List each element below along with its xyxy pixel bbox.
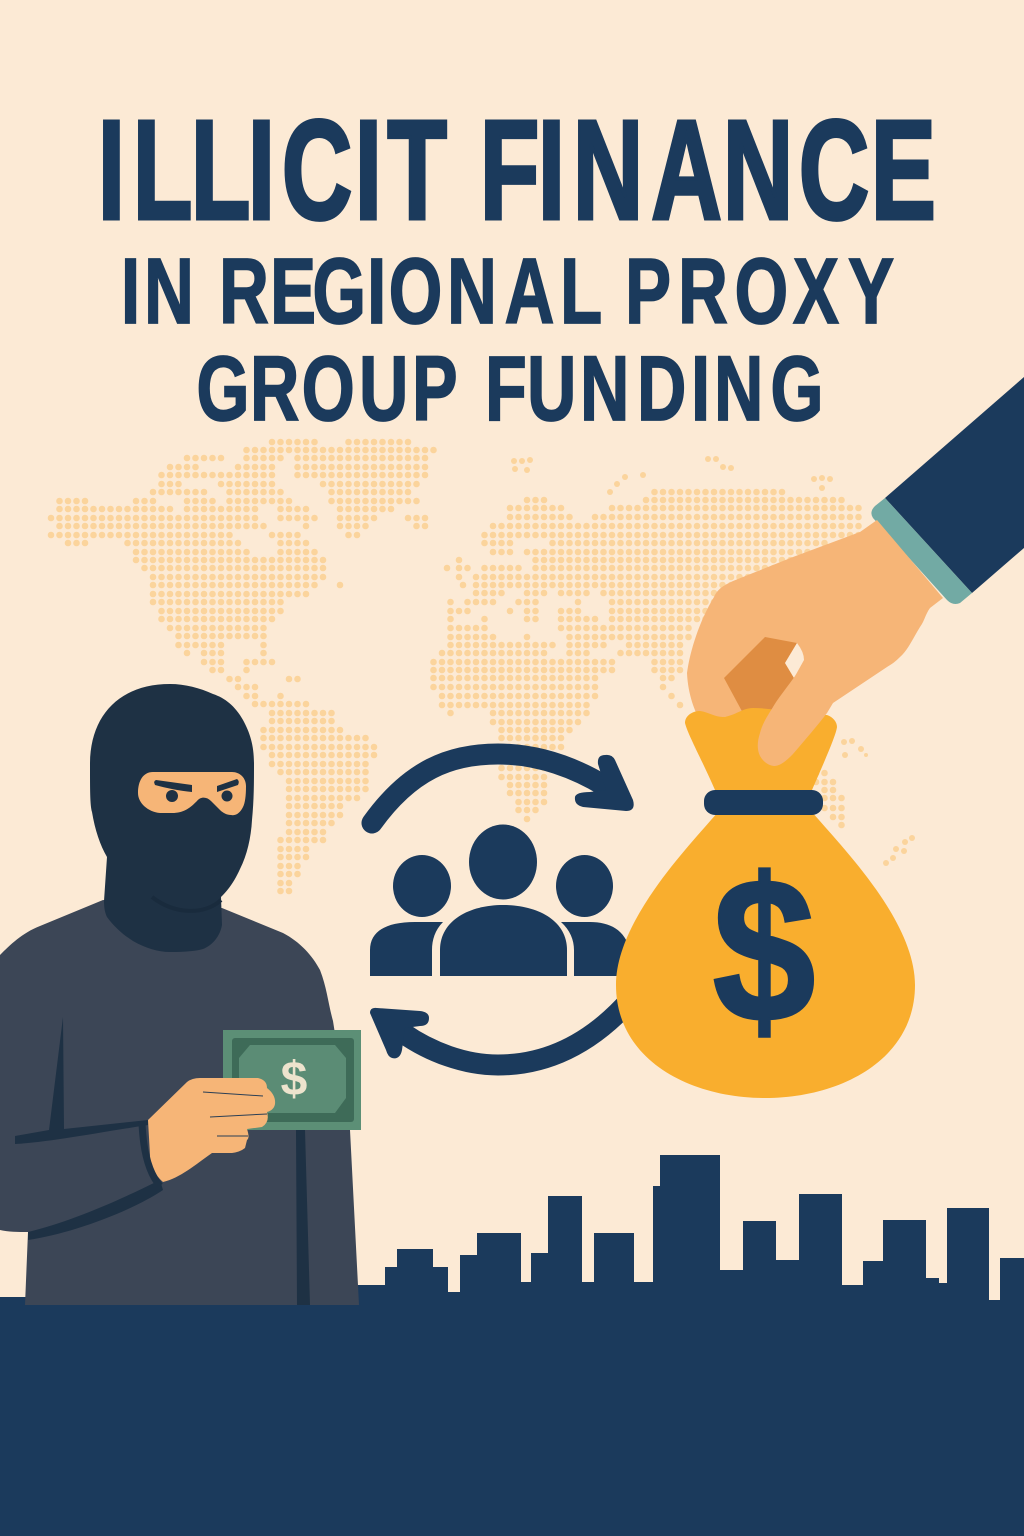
- arrow: top circular: [372, 754, 634, 823]
- icon: group of people: [370, 824, 630, 976]
- title: [98, 90, 936, 440]
- arrow: bottom circular: [370, 1000, 630, 1065]
- banknote: [223, 1030, 361, 1130]
- dotted world map: [51, 442, 915, 891]
- mask chin fold: [152, 897, 221, 911]
- suit sleeve: [885, 377, 1024, 593]
- money bag: $: [713, 836, 815, 1065]
- sweater: [0, 900, 359, 1305]
- title: GROUP FUNDING: [196, 338, 823, 440]
- brows and eyes: [154, 779, 239, 802]
- masked figure: [0, 684, 361, 1305]
- title: ILLICIT FINANCE: [98, 90, 936, 249]
- title: IN REGIONAL PROXY: [121, 240, 894, 343]
- balaclava: [90, 684, 254, 952]
- cuff: [142, 1122, 160, 1186]
- banknote: $: [281, 1053, 308, 1106]
- shirt cuff: [871, 498, 972, 604]
- eye slit: [138, 772, 246, 815]
- skyline and bottom band: [0, 1155, 1024, 1536]
- hand: [687, 520, 943, 720]
- sleeve folds: [15, 1017, 310, 1305]
- money bag: [616, 708, 915, 1098]
- hand holding note: [148, 1078, 275, 1182]
- index finger: [758, 662, 833, 766]
